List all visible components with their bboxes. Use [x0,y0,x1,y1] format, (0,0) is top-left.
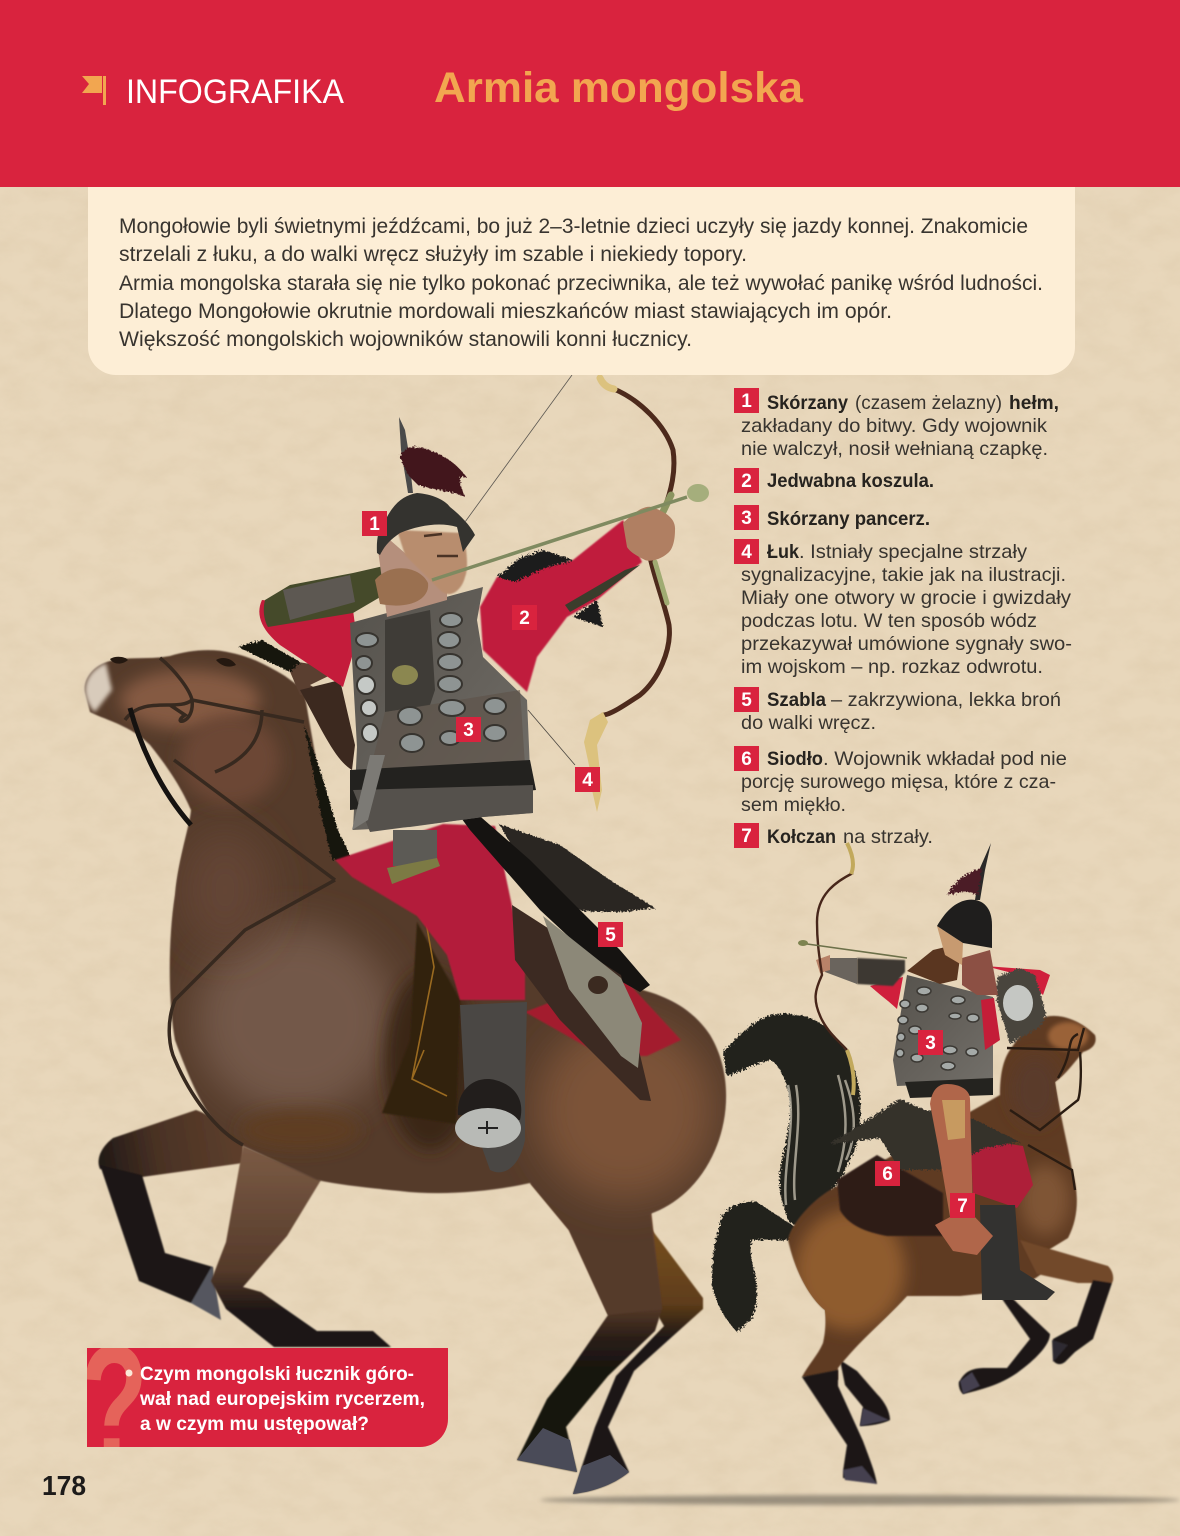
image label 6 [875,1161,900,1186]
legend item 1: Skórzany [767,392,848,414]
image label 2: 2 [519,608,530,629]
panel: intro text: Dlatego Mongołowie okrutnie mordowali mieszkańców miast stawiających im opór. [119,300,892,323]
legend item 7: na strzały. [843,826,933,848]
image label 5: 5 [605,925,616,946]
legend item 1: hełm, [1009,392,1059,414]
legend item 6: . Wojownik wkładał pod nie [823,748,1067,770]
helmet [377,493,475,555]
large rider [259,375,709,1172]
legend item 4: podczas lotu. W ten sposób wódz [741,610,1037,632]
legend item 5: Szabla [767,689,826,711]
hand on bow [623,507,675,561]
armour vest [350,587,536,884]
legend item 4: sygnalizacyjne, takie jak na ilustracji. [741,564,1066,586]
small rider sleeve and arm [870,977,903,1009]
large horse tail [723,1014,860,1226]
legend item 4: przekazywał umówione sygnały swo- [741,633,1072,655]
legend item 2: Jedwabna koszula. [767,470,934,492]
image label 2 [512,605,537,630]
legend item 1: zakładany do bitwy. Gdy wojownik [741,415,1047,437]
far hoof [573,1455,629,1494]
heading: infografika: INFOGRAFIKA [126,73,344,111]
ear [285,660,343,700]
legend item 1: 1 [741,391,752,412]
sabre [434,781,650,992]
legend item 3: 3 [741,508,752,529]
legend item 4: 4 [741,542,752,563]
small rider pants [970,1138,1033,1208]
legend item 4 [734,539,1072,678]
image label 3 small rider: 3 [925,1033,936,1054]
small horse front leg and hind leg [802,1240,1113,1484]
legend item 5: – zakrzywiona, lekka broń [831,689,1061,711]
legend item 6 [734,746,1067,816]
panel: intro text [88,187,1075,375]
panel: intro text: Większość mongolskich wojowników stanowili konni łucznicy. [119,328,692,351]
small horse with rider [712,843,1113,1484]
page number: 178 [42,1470,86,1501]
image label 1: 1 [369,514,380,535]
legend item 6: sem miękło. [741,794,846,816]
near hoof [517,1428,577,1472]
small saddle [837,1155,943,1236]
face [397,530,467,594]
callout: question box: wał nad europejskim rycerzem, [139,1388,425,1410]
legend item 7: 7 [741,826,752,847]
legend item 5: 5 [741,690,752,711]
image label 3 [456,717,481,742]
big horse body [85,650,726,1315]
shoulder behind rider [300,680,355,770]
small horse body [788,1016,1096,1380]
header band [0,0,1180,187]
small quiver [930,1084,993,1255]
small bow and arrow [798,843,907,1095]
icon: question mark: ? [80,1311,148,1495]
small rider shoulder [985,966,1050,995]
legend item 5 [734,687,1061,734]
small horse bridle [1007,1028,1084,1190]
bridle [125,658,335,1145]
image label 3 small rider [918,1030,943,1055]
image label 5 [598,922,623,947]
fist on bowstring [375,568,428,606]
legend item 2: 2 [741,471,752,492]
image label 7 [950,1193,975,1218]
arrow [432,484,709,580]
image label 7: 7 [957,1196,968,1217]
bow [584,378,674,812]
legend item 4: im wojskom – np. rozkaz odwrotu. [741,656,1043,678]
legend item 4: Miały one otwory w grocie i gwizdały [741,587,1071,609]
image label 4: 4 [582,770,593,791]
neck guard [378,540,447,617]
icon: flag [82,76,106,105]
small rider scarf and neck guard [907,943,962,984]
large horse [85,640,726,1494]
ground shadow [540,1495,1180,1505]
legend item 3: Skórzany pancerz. [767,508,930,530]
legend list [734,388,1072,848]
panel: intro text: strzelali z łuku, a do walki wręcz służyły im szable i niekiedy topory. [119,243,747,266]
saddle flap [512,905,651,1101]
small rider armour vest [893,975,993,1098]
image label 4 [575,767,600,792]
saddle cloth [382,922,460,1124]
small horse tail [712,1202,795,1332]
legend item 7: Kołczan [767,826,836,848]
muzzle [85,663,112,712]
legend item 1: nie walczył, nosił wełnianą czapkę. [741,438,1048,460]
legend item 4: Łuk [767,541,799,563]
mane [238,640,352,860]
bow string [465,375,572,522]
legend item 6: 6 [741,749,752,770]
panel: intro text: Mongołowie byli świetnymi jeźdźcami, bo już 2–3-letnie dzieci uczyły się jazdy konnej. Znakomicie [119,215,1028,238]
red trousers [335,824,525,1000]
raised foreleg A [99,1110,243,1320]
callout: question box [87,1348,448,1447]
legend item 1: (czasem żelazny) [855,392,1002,414]
legend item 5: do walki wręcz. [741,712,876,734]
right red sleeve with fur [480,520,642,692]
small rider helmet [937,900,992,948]
panel: intro text: Armia mongolska starała się nie tylko pokonać przeciwnika, ale też wywołać panikę wśród ludności. [119,272,1043,295]
callout: question box: a w czym mu ustępował? [140,1413,369,1435]
small rider boot [980,1205,1055,1300]
legend item 1 [734,388,1059,460]
near hind leg [517,1183,662,1472]
tassets [393,830,437,866]
boot and stirrup [455,1002,527,1172]
red blanket [525,975,681,1056]
callout: question box: Czym mongolski łucznik góro- [140,1363,414,1385]
arm: left red sleeve [259,600,357,687]
small horse: far legs [840,1296,1050,1426]
legend item 6: porcję surowego mięsa, które z cza- [741,771,1056,793]
legend item 4: . Istniały specjalne strzały [799,541,1027,563]
eye and nostril [110,657,236,667]
image label 1 [362,511,387,536]
image label 3: 3 [463,720,474,741]
title: Armia mongolska [434,64,804,112]
far hind leg [573,1214,703,1494]
image label 6: 6 [882,1164,893,1185]
left arm guard [264,565,388,627]
small rider fur skirt [830,1099,1020,1170]
helmet spike and plume [399,417,413,493]
fur skirt [499,824,655,912]
legend item 7 [734,823,933,848]
leader line [528,710,575,765]
legend item 6: Siodło [767,748,823,770]
raised foreleg B [211,1146,391,1347]
